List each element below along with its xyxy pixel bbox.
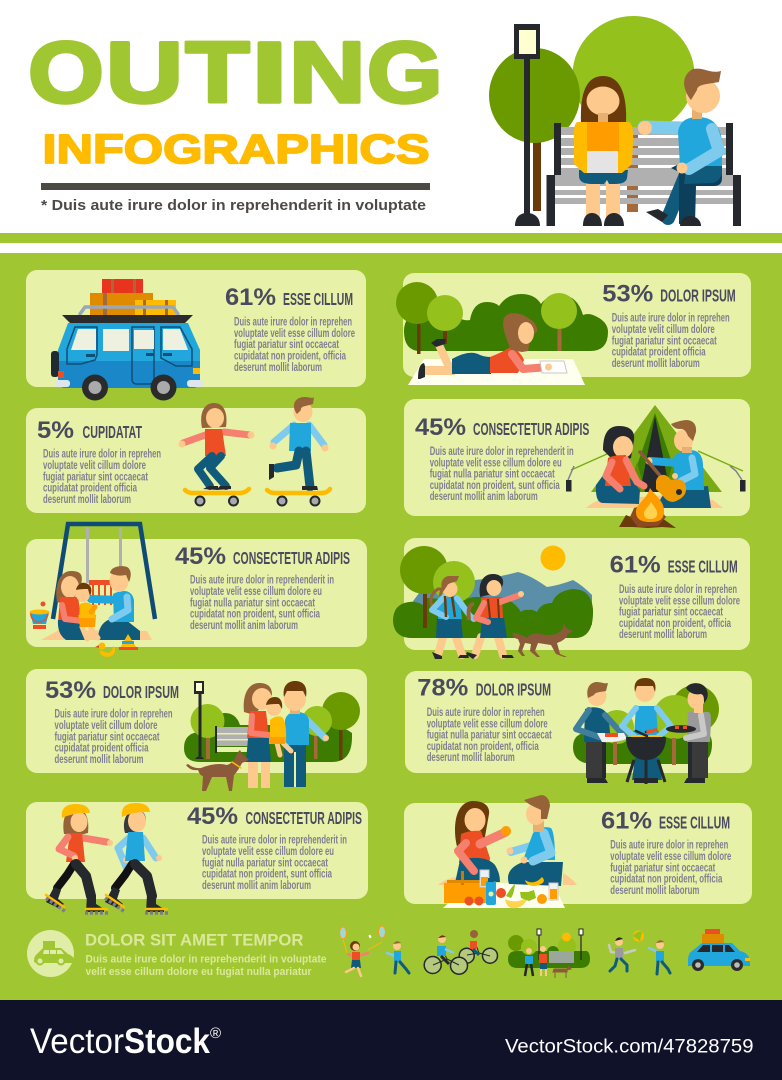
body text (54, 707, 172, 766)
panel: esse cillum, hikers (393, 538, 750, 659)
stat: 53%: 53% (602, 281, 654, 308)
title rule (41, 183, 430, 190)
panel: consectetur adipis, rollerbladers (26, 802, 368, 913)
heading: outing: G (367, 25, 442, 121)
body text: voluptate velit esse cillum dolore eu (430, 455, 562, 469)
footer bar (0, 1000, 782, 1080)
icon: boys playing ball (609, 930, 670, 974)
card (403, 273, 751, 377)
icon: mini park with walkers (508, 929, 590, 978)
watermark url: VectorStock.com/47828759 (505, 1037, 754, 1058)
body text (612, 311, 730, 370)
label: ESSE CILLUM (283, 289, 353, 309)
main green background (0, 253, 782, 1000)
icon: family at swing set (30, 524, 155, 657)
watermark logo: Vector (30, 1022, 124, 1061)
panel: dolor ipsum, family walking dog (26, 669, 367, 791)
watermark logo (30, 1022, 221, 1061)
panel: esse cillum, picnic (404, 795, 752, 908)
body text: cupidatat proident officia (43, 481, 137, 495)
body text (619, 582, 740, 641)
body text: fugiat nulla pariatur sint occaecat (202, 855, 328, 869)
body text: deserunt mollit anim laborum (430, 489, 538, 503)
body text: Duis aute irure dolor in reprehenderit in (202, 833, 347, 847)
panel: dolor ipsum, reading on lawn (396, 273, 751, 385)
stat: 45%: 45% (415, 414, 466, 441)
body text: deserunt mollit laborum (54, 752, 144, 766)
label: DOLOR IPSUM (103, 682, 179, 702)
body text: voluptate velit esse cillum dolore (427, 716, 548, 730)
body text: voluptate velit cillum dolore (54, 718, 158, 732)
icon: family in park with dog (184, 681, 360, 791)
icon: small car with luggage (688, 929, 750, 971)
body text: fugiat pariatur sint occaecat (43, 469, 148, 483)
body text: fugiat nulla pariatur sint occaecat (427, 728, 552, 742)
body text: deserunt mollit laborum (43, 492, 131, 506)
stat: 45%: 45% (187, 803, 238, 830)
panel: consectetur adipis, camping (404, 399, 750, 528)
body text: voluptate velit esse cillum dolore eu (202, 844, 334, 858)
green band under header (0, 233, 782, 243)
label: DOLOR IPSUM (476, 680, 551, 700)
body text: voluptate velit esse cillum dolore (234, 326, 355, 340)
watermark logo: ® (210, 1025, 221, 1042)
heading: outing: U (106, 25, 183, 121)
body text: deserunt mollit laborum (427, 750, 515, 764)
panel: cupidatat, skateboarders (26, 397, 366, 513)
stat: 78%: 78% (417, 675, 469, 702)
stat: 61%: 61% (225, 284, 276, 311)
body text: deserunt mollit laborum (619, 627, 707, 641)
icon: couple camping by fire (566, 405, 746, 528)
body text: cupidatat proident officia (54, 741, 149, 755)
body text (427, 705, 552, 764)
card (405, 671, 752, 773)
label: CONSECTETUR ADIPIS (233, 548, 350, 568)
icon: badminton players (340, 926, 409, 976)
icon: two skateboarders (178, 397, 330, 506)
body text: fugiat pariatur sint occaecat (234, 337, 339, 351)
card (26, 669, 367, 773)
body text: voluptate velit esse cillum dolore eu (190, 584, 322, 598)
label: ESSE CILLUM (668, 557, 738, 577)
label: DOLOR IPSUM (660, 286, 736, 306)
card (404, 803, 752, 904)
title (28, 25, 443, 214)
body text: cupidatat proident officia (612, 345, 706, 359)
body text: Duis aute irure dolor in reprehen (234, 315, 352, 329)
body text: voluptate velit cillum dolore (43, 458, 146, 472)
illustration: couple on park bench (489, 16, 741, 226)
card (404, 538, 750, 650)
stat: 53%: 53% (45, 677, 96, 704)
panel: dolor ipsum, barbecue (405, 671, 752, 784)
card (26, 270, 366, 387)
card (404, 399, 750, 516)
heading: outing: O (28, 25, 104, 121)
label: CONSECTETUR ADIPIS (473, 419, 589, 439)
heading: infographics: INFOGRAPHICS (42, 126, 429, 172)
body text: fugiat pariatur sint occaecat (612, 333, 717, 347)
icon: car badge (27, 930, 74, 977)
stat: 61%: 61% (601, 807, 652, 834)
body text: cupidatat non proident, officia (234, 348, 346, 362)
body text: Duis aute irure dolor in reprehen (427, 705, 545, 719)
callout text (86, 954, 326, 978)
body text: fugiat nulla pariatur sint occaecat (190, 595, 315, 609)
body text: deserunt mollit anim laborum (202, 878, 311, 892)
icon: two rollerbladers (46, 803, 169, 913)
icon: hikers with dog (393, 546, 593, 659)
heading: outing: N (289, 25, 366, 121)
heading: outing: I (252, 25, 288, 121)
icon: couple picnicking (438, 795, 577, 908)
body text: fugiat pariatur sint occaecat (619, 605, 723, 619)
stat: 61%: 61% (610, 552, 661, 579)
label: CUPIDATAT (82, 422, 142, 442)
body text: deserunt mollit anim laborum (190, 618, 298, 632)
body text: cupidatat non proident, sunt officia (202, 867, 332, 881)
body text: cupidatat non proident, officia (610, 872, 723, 886)
bottom callout (27, 930, 326, 978)
icon: three men at barbecue (573, 678, 719, 784)
body text: cupidatat non proident, sunt officia (430, 478, 560, 492)
callout text: velit esse cillum dolore eu fugiat nulla pariatur (86, 966, 312, 978)
body text (234, 315, 355, 374)
icon: van with luggage (51, 279, 203, 400)
stat: 5%: 5% (37, 417, 74, 444)
card (26, 539, 367, 647)
card (26, 802, 368, 899)
label: CONSECTETUR ADIPIS (246, 808, 362, 828)
body text (202, 833, 347, 892)
card (26, 408, 366, 513)
body text: Duis aute irure dolor in reprehen (43, 447, 161, 461)
stat: 45%: 45% (175, 543, 226, 570)
body text (610, 838, 732, 897)
body text: deserunt mollit laborum (234, 360, 322, 374)
body text (43, 447, 161, 506)
watermark logo: Stock (124, 1022, 210, 1061)
body text: deserunt mollit laborum (610, 883, 699, 897)
icon: person reading on blanket (396, 282, 608, 385)
body text: cupidatat non proident, sunt officia (190, 607, 320, 621)
body text: fugiat pariatur sint occaecat (54, 729, 160, 743)
callout heading: DOLOR SIT AMET TEMPOR (85, 930, 304, 949)
callout text: Duis aute irure dolor in reprehenderit in voluptate (86, 954, 326, 966)
heading: outing: T (186, 25, 250, 121)
body text: cupidatat non proident, officia (427, 739, 539, 753)
panel: esse cillum, van (26, 270, 366, 400)
icon: cyclists (424, 930, 498, 974)
panel: consectetur adipis, family at swing (26, 524, 367, 657)
body text: Duis aute irure dolor in reprehen (54, 707, 172, 721)
label: ESSE CILLUM (659, 812, 730, 832)
body text (190, 573, 334, 632)
body text: voluptate velit cillum dolore (612, 322, 715, 336)
body text: fugiat nulla pariatur sint occaecat (430, 467, 555, 481)
subtitle: * Duis aute irure dolor in reprehenderit in voluptate (41, 197, 426, 214)
body text (430, 444, 574, 503)
body text: fugiat pariatur sint occaecat (610, 860, 715, 874)
body text: deserunt mollit laborum (612, 356, 700, 370)
body text: Duis aute irure dolor in reprehenderit in (430, 444, 574, 458)
body text: Duis aute irure dolor in reprehenderit in (190, 573, 334, 587)
